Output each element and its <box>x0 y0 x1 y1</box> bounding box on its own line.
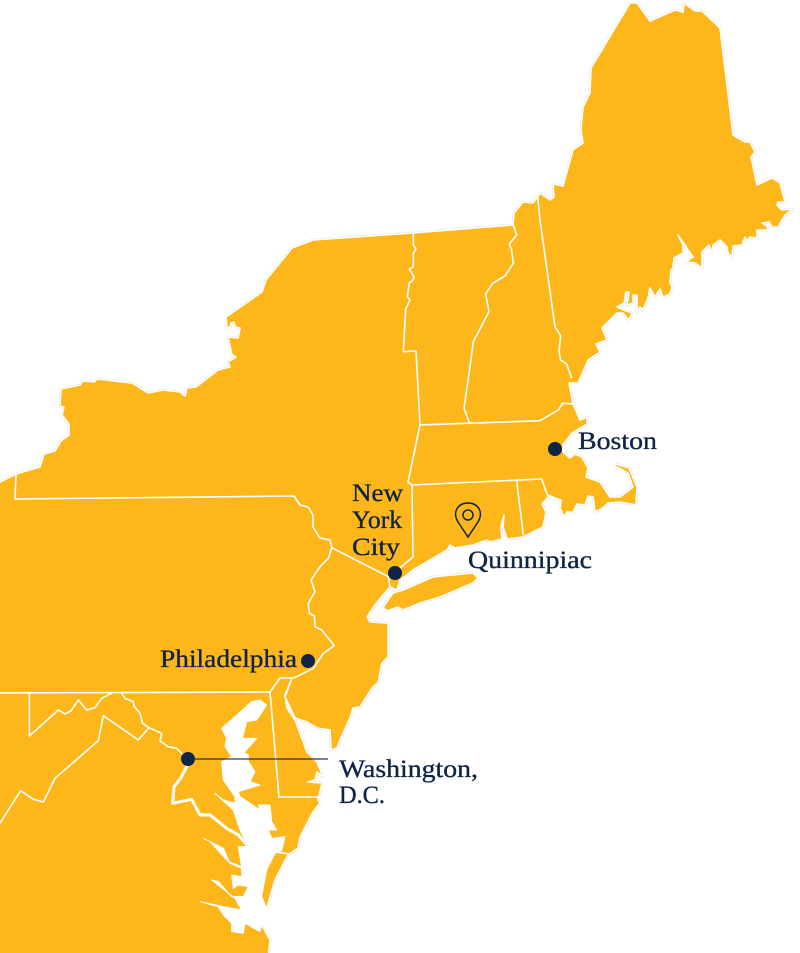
city marker: Philadelphia <box>301 654 315 668</box>
label: New York City <box>352 480 403 561</box>
state borders <box>0 196 573 854</box>
label: Quinnipiac: Quinnipiac <box>468 547 592 574</box>
label: Philadelphia: Philadelphia <box>160 646 297 673</box>
city marker: Washington, D.C. <box>181 752 195 766</box>
leader line to Washington, D.C. <box>188 758 328 760</box>
city marker: Boston <box>548 442 562 456</box>
label: New York City: New <box>352 480 403 507</box>
city marker: New York City <box>388 566 402 580</box>
water: Chesapeake Bay and tributaries <box>173 700 285 933</box>
label: Washington, D.C.: D.C. <box>339 782 385 809</box>
label: Washington, D.C.: Washington, <box>339 756 478 783</box>
label: Washington, D.C. <box>339 756 478 809</box>
label: Boston: Boston <box>578 428 658 455</box>
icon: location pin at Quinnipiac <box>456 503 480 537</box>
label: New York City: City <box>352 534 401 561</box>
label: New York City: York <box>352 507 402 534</box>
